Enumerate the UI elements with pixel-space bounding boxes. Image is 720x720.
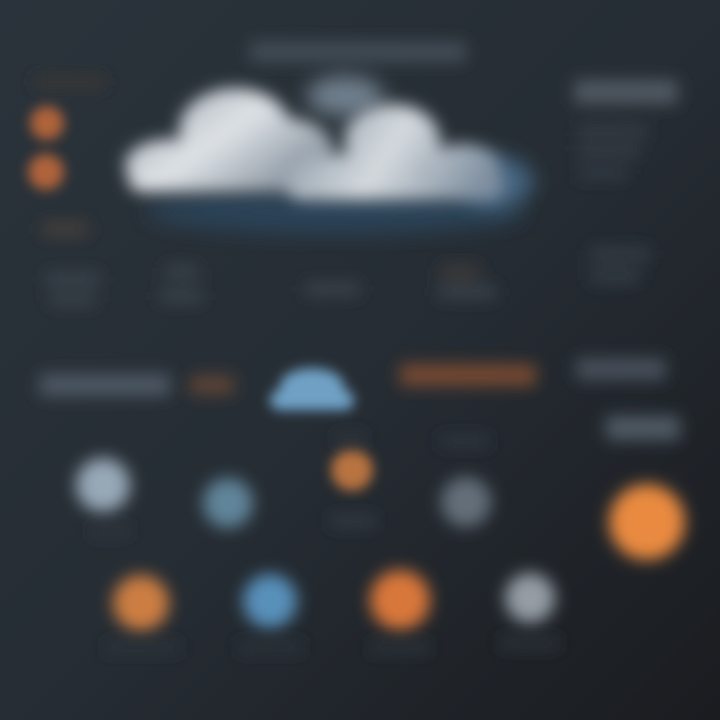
orb row two: [113, 570, 555, 631]
middle row: [40, 358, 680, 440]
grey label left: [40, 374, 170, 396]
cloud shadow: [145, 190, 525, 234]
left orange stack: [28, 76, 105, 236]
blue cloud: [270, 368, 354, 410]
orb labels two: [105, 638, 560, 652]
orb: orange: [113, 575, 169, 631]
orb: large orange: [609, 484, 685, 560]
orb: light grey: [505, 573, 555, 623]
orb: deep orange: [370, 570, 430, 630]
small label: [42, 222, 88, 236]
cloud back edge: [307, 76, 533, 208]
title: [250, 42, 466, 62]
right cloud mass: [285, 104, 503, 200]
orb labels one: [90, 434, 490, 535]
orb: pale blue: [76, 458, 130, 512]
upper text columns: [45, 266, 496, 305]
orb: grey: [441, 477, 491, 527]
orange label small: [190, 376, 234, 394]
grey label right: [576, 358, 666, 380]
main cloud: [125, 76, 533, 234]
label right lower: [606, 416, 680, 440]
orb: sky blue: [243, 574, 297, 628]
orange heading: [35, 76, 105, 88]
left cloud mass: [125, 88, 333, 192]
orb: small orange: [331, 449, 373, 491]
right top text block: [574, 80, 678, 282]
orb: blue: [203, 478, 253, 528]
orange dot bottom: [28, 154, 64, 190]
orange dot top: [30, 106, 64, 140]
orb row one: [76, 449, 685, 560]
orange label wide: [400, 364, 536, 386]
